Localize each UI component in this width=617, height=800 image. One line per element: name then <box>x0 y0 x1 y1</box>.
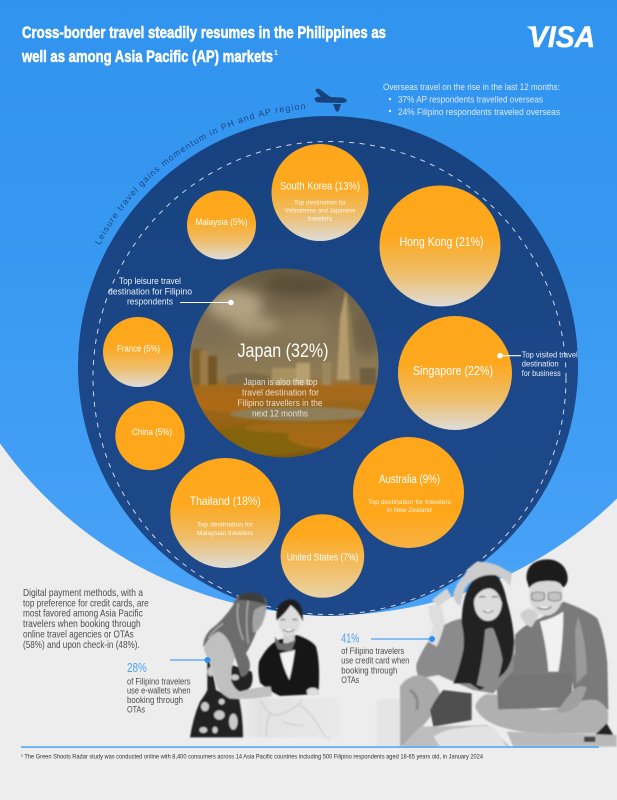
photo: couple booking with laptop <box>377 559 617 747</box>
callout: top business destination <box>497 350 578 378</box>
text block: digital payment methods: travelers when booking through <box>23 618 141 630</box>
bubble: Thailand: Top destination for <box>197 522 254 529</box>
bubble: Thailand: Thailand (18%) <box>190 494 261 508</box>
bubble: China <box>115 401 185 470</box>
title: 1 <box>274 50 278 57</box>
text: Japan note: Japan is also the top <box>244 376 318 387</box>
bubble: South Korea: travelers <box>308 216 332 222</box>
text: Japan note: next 12 months <box>252 408 308 418</box>
bubble: Australia: Australia (9%) <box>379 474 440 486</box>
callout: top leisure destination <box>108 276 234 307</box>
title: Cross-border travel steadily resumes in the Philippines as <box>22 23 386 42</box>
callout: top leisure destination: destination for Filipino <box>108 287 192 297</box>
photo: city skyline at autumn <box>189 268 384 459</box>
bubble: Malaysia: Malaysia (5%) <box>196 217 248 228</box>
bubble: Hong Kong: Hong Kong (21%) <box>400 235 484 249</box>
text block: digital payment methods: (58%) and upon check-in (48%). <box>23 639 140 651</box>
footnote: ¹ The Green Shoots Radar study was conducted online with 8,400 consumers across 14 Asia Pacific countries including 500 Filipino respondents aged 18-65 years old, in January 2024 <box>21 754 483 760</box>
text: Japan note <box>238 376 322 418</box>
stat: 28% e-wallets <box>127 657 210 716</box>
callout: top leisure destination: Top leisure travel <box>119 276 181 286</box>
bubble: Australia: in New Zealand <box>387 507 432 514</box>
stat: 28% e-wallets: of Filipino travelers <box>127 676 191 687</box>
text: Japan note: Filipino travellers in the <box>238 397 322 408</box>
callout: top business destination: for business <box>522 369 561 378</box>
background: large blue circle <box>0 0 617 615</box>
overseas travel summary <box>383 82 560 118</box>
bubble: Singapore: Singapore (22%) <box>413 364 493 378</box>
text block: digital payment methods: online travel agencies or OTAs <box>23 628 134 640</box>
photo: traveller and hotel receptionist <box>190 593 340 738</box>
bubble: France <box>103 317 173 387</box>
icon: airplane <box>314 88 347 112</box>
stat: 41% credit card: use credit card when <box>341 656 409 667</box>
bubble: Singapore <box>398 316 512 430</box>
overseas travel summary: 37% AP respondents travelled overseas <box>398 94 543 106</box>
callout: top business destination: destination <box>522 360 559 369</box>
text block: digital payment methods: top preference for credit cards, are <box>23 597 149 609</box>
overseas travel summary: Overseas travel on the rise in the last 12 months: <box>383 82 560 93</box>
text block: digital payment methods: most favored among Asia Pacific <box>23 608 143 620</box>
bubble: Thailand <box>170 458 280 568</box>
callout: top business destination: Top visited travel <box>522 350 578 360</box>
bubble: Malaysia <box>187 190 256 260</box>
stat: 28% e-wallets: OTAs <box>127 705 145 716</box>
stat: 41% credit card: booking through <box>341 665 397 676</box>
text block: digital payment methods <box>23 587 149 651</box>
bubble: United States <box>281 514 364 598</box>
stat: 41% credit card: of Filipino travelers <box>341 646 404 657</box>
bubble: China: China (5%) <box>132 427 172 437</box>
bubble: South Korea: Top destination for <box>294 200 346 206</box>
bubble: Australia: Top destination for travelers <box>368 499 452 506</box>
text block: digital payment methods: Digital payment methods, with a <box>23 587 143 599</box>
curved label: leisure travel: Leisure travel gains momentum in PH and AP region <box>94 104 305 245</box>
bubble: France: France (5%) <box>117 344 160 354</box>
bubble: Hong Kong <box>380 186 500 306</box>
bubble: South Korea <box>272 144 368 241</box>
bubble: Thailand: Malaysian travelers <box>197 530 254 537</box>
text: Japan heading: Japan (32%) <box>238 341 328 362</box>
navy globe panel <box>78 116 578 616</box>
text: Japan note: travel destination for <box>242 386 319 398</box>
bubble: Japan photo <box>189 268 384 459</box>
stat: 28% e-wallets: 28% <box>127 660 147 675</box>
title <box>21 23 386 66</box>
callout: top leisure destination: respondents <box>127 297 173 307</box>
stat: 41% credit card <box>341 631 435 686</box>
title: well as among Asia Pacific (AP) markets <box>21 47 273 66</box>
stat: 41% credit card: OTAs <box>341 675 359 686</box>
overseas travel summary: 24% Filipino respondents traveled overseas <box>398 107 560 118</box>
stat: 28% e-wallets: booking through <box>127 695 183 706</box>
bubble: Australia <box>353 437 464 548</box>
stat: 41% credit card: 41% <box>341 631 360 646</box>
Visa logo: VISA <box>529 21 595 54</box>
bubble: South Korea: South Korea (13%) <box>280 180 360 192</box>
stat: 28% e-wallets: use e-wallets when <box>127 686 190 697</box>
bubble: United States: United States (7%) <box>287 552 358 564</box>
bubble: South Korea: Vietnamese and Japanese <box>284 208 356 214</box>
